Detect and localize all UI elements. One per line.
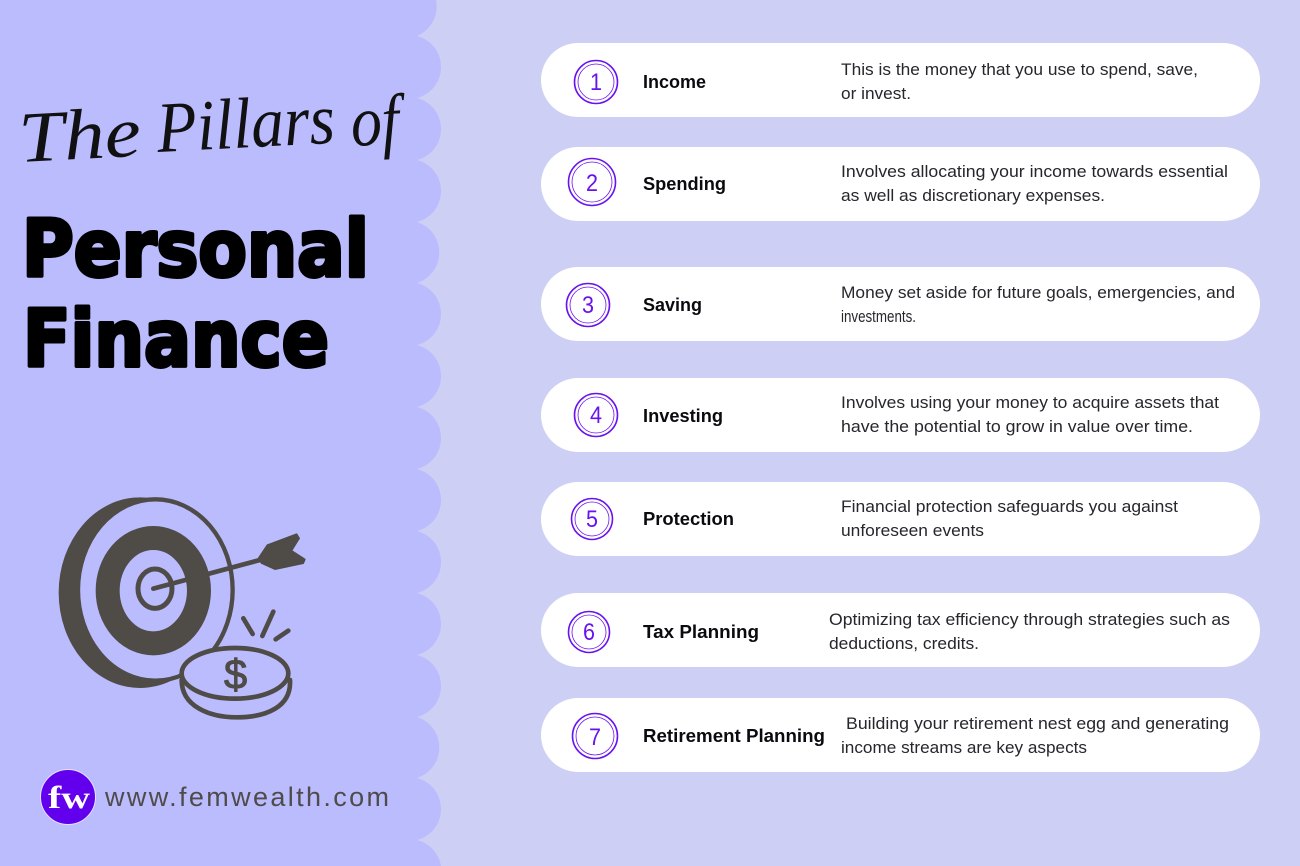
row 7: Retirement Planning: income streams are key aspects [841,738,1087,757]
website url: www.femwealth.com [104,782,389,812]
title: script line: of [349,79,408,162]
row 2: Spending: Involves allocating your income towards essential [841,162,1228,181]
icon: target with arrow and coin: $ [224,650,247,697]
row 3: Saving: Saving [643,295,702,315]
row 2: Spending [541,147,1260,221]
row 7: Retirement Planning: 7 [589,724,601,751]
row 3: Saving: 3 [582,292,594,319]
row 2: Spending: Spending [643,174,726,194]
row 1: Income: or invest. [841,84,911,103]
row 3: Saving: Money set aside for future goals, emergencies, and [841,283,1235,302]
icon: target with arrow and coin [59,497,305,717]
row 3: Saving: investments. [841,307,916,326]
row 4: Investing: have the potential to grow in value over time. [841,417,1193,436]
row 4: Investing: 4 [590,402,602,429]
row 6: Tax Planning [541,593,1260,667]
row 6: Tax Planning: Tax Planning [643,622,759,642]
panel: left scalloped sidebar [0,0,441,866]
row 7: Retirement Planning [541,698,1260,772]
row 5: Protection: unforeseen events [841,521,984,540]
title: script line: Pillars [154,79,337,168]
row 1: Income: 1 [590,69,602,96]
row 1: Income: Income [643,72,706,92]
row 4: Investing: Investing [643,406,723,426]
row 6: Tax Planning: 6 [583,619,595,646]
logo badge: fw [48,779,90,815]
row 4: Investing [541,378,1260,452]
row 1: Income: This is the money that you use to spend, save, [841,60,1198,79]
row 6: Tax Planning: Optimizing tax efficiency through strategies such as [829,610,1230,629]
row 5: Protection [541,482,1260,556]
title: Personal Finance: Finance [23,295,329,385]
title: script line: The [17,92,143,178]
row 4: Investing: Involves using your money to acquire assets that [841,393,1219,412]
row 6: Tax Planning: deductions, credits. [829,634,979,653]
title: script line [17,79,408,178]
row 7: Retirement Planning: Building your retirement nest egg and generating [846,714,1229,733]
row 1: Income [541,43,1260,117]
row 7: Retirement Planning: Retirement Planning [643,726,825,746]
row 3: Saving [541,267,1260,341]
row 5: Protection: Financial protection safeguards you against [841,497,1178,516]
row 5: Protection: Protection [643,509,734,529]
title: Personal Finance [22,205,369,385]
title: Personal Finance: Personal [22,205,369,295]
row 2: Spending: as well as discretionary expenses. [841,186,1105,205]
logo badge [40,770,96,824]
row 2: Spending: 2 [586,170,598,197]
row 5: Protection: 5 [586,506,598,533]
